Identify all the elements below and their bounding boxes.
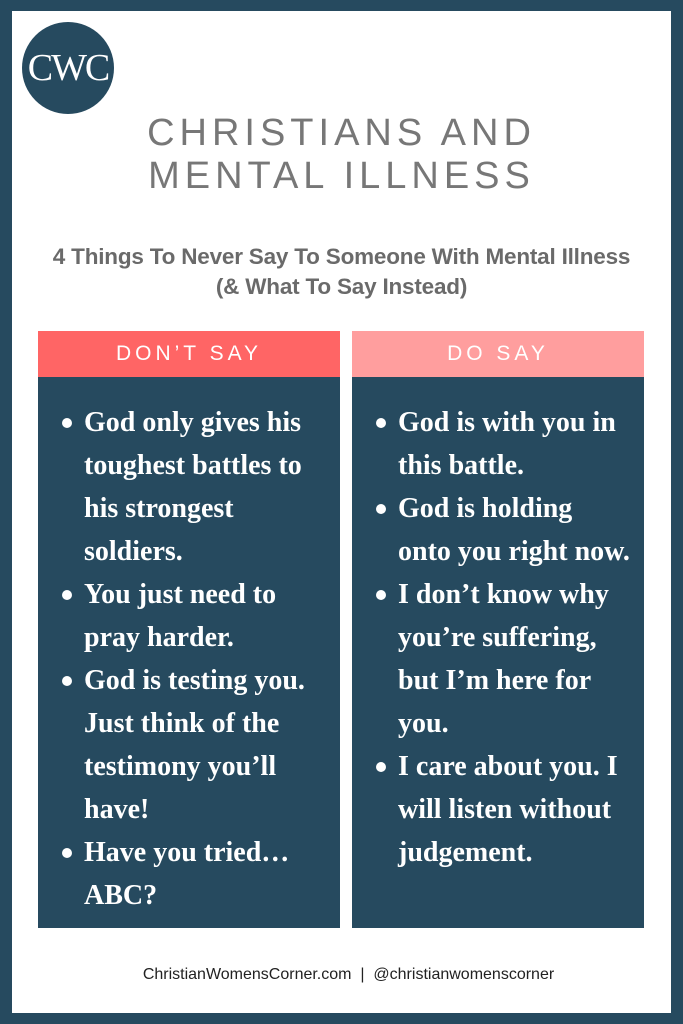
title bbox=[147, 112, 536, 197]
list: do say: onto you right now. bbox=[398, 536, 630, 567]
list: don't say: have! bbox=[84, 794, 149, 825]
list: do say: will listen without bbox=[398, 794, 611, 825]
list: don't say: God only gives his bbox=[84, 407, 301, 438]
list: do say: this battle. bbox=[398, 450, 524, 481]
list: don't say: You just need to bbox=[84, 579, 276, 610]
header: do say: DO SAY bbox=[447, 342, 549, 365]
list: don't say: toughest battles to bbox=[84, 450, 302, 481]
list: do say: but I’m here for bbox=[398, 665, 591, 696]
list: don't say: pray harder. bbox=[84, 622, 234, 653]
header: do say bbox=[352, 331, 644, 377]
list: don't say: soldiers. bbox=[84, 536, 183, 567]
subtitle: 4 Things To Never Say To Someone With Mental Illness bbox=[53, 244, 630, 269]
list: do say: God is holding bbox=[398, 493, 572, 524]
list: do say: I don’t know why bbox=[398, 579, 609, 610]
list: don't say bbox=[62, 407, 305, 911]
list: don't say: his strongest bbox=[84, 493, 234, 524]
list: don't say: Have you tried… bbox=[84, 837, 289, 868]
title: MENTAL ILLNESS bbox=[148, 155, 535, 197]
panel: don't say bbox=[38, 331, 340, 928]
panel: do say bbox=[352, 331, 644, 928]
list: don't say: testimony you’ll bbox=[84, 751, 276, 782]
list: do say bbox=[376, 407, 630, 868]
footer: ChristianWomensCorner.com | @christianwomenscorner bbox=[143, 966, 554, 983]
subtitle: (& What To Say Instead) bbox=[216, 274, 467, 299]
title: CHRISTIANS AND bbox=[147, 112, 536, 154]
list: do say: judgement. bbox=[398, 837, 533, 868]
logo bbox=[22, 22, 114, 114]
subtitle bbox=[53, 244, 630, 299]
list: do say: I care about you. I bbox=[398, 751, 618, 782]
header: don't say: DON’T SAY bbox=[116, 342, 262, 365]
list: do say: you. bbox=[398, 708, 449, 739]
header: don't say bbox=[38, 331, 340, 377]
logo: CWC bbox=[28, 47, 108, 89]
list: don't say: God is testing you. bbox=[84, 665, 305, 696]
list: don't say: ABC? bbox=[84, 880, 157, 911]
list: do say: God is with you in bbox=[398, 407, 616, 438]
list: do say: you’re suffering, bbox=[398, 622, 597, 653]
list: don't say: Just think of the bbox=[84, 708, 279, 739]
